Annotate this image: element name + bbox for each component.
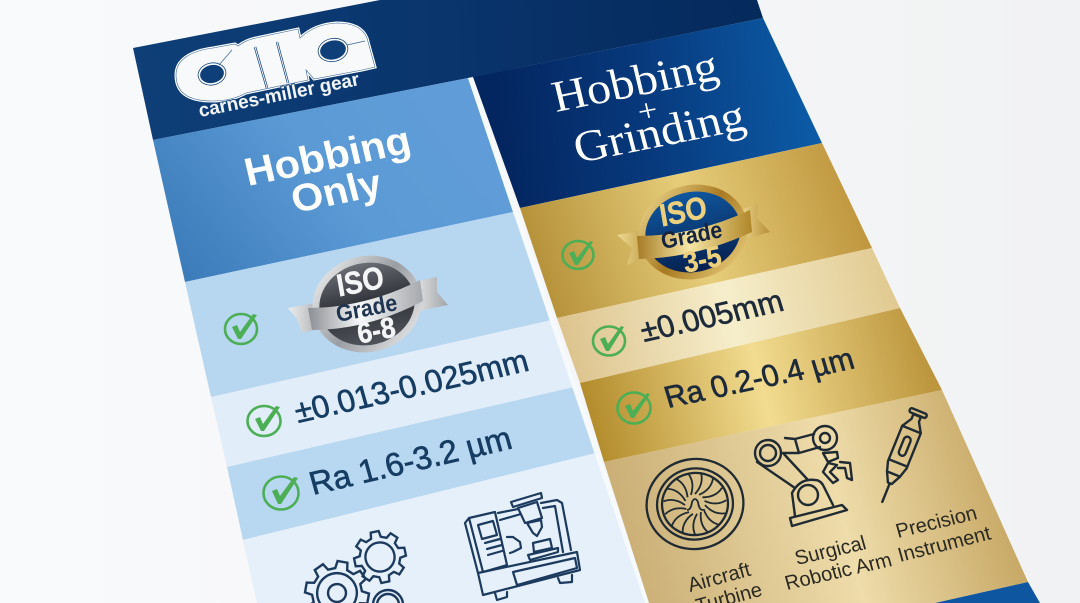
column header band xyxy=(473,18,822,208)
medal ring xyxy=(303,245,431,363)
spindle cone xyxy=(527,520,542,536)
badge: ISO grade 6-8 xyxy=(288,245,448,363)
badge number: 3-5 xyxy=(681,240,724,279)
logo outer halo xyxy=(176,23,375,101)
upper gear xyxy=(350,527,410,587)
medal face xyxy=(637,182,749,282)
instrument bands xyxy=(884,426,921,478)
applications row xyxy=(243,453,646,603)
logo hole rings xyxy=(196,36,350,88)
gripper xyxy=(823,452,852,483)
label: precision: Precision xyxy=(893,502,980,543)
icon: CNC machine xyxy=(465,493,580,600)
instrument cap xyxy=(909,408,927,419)
machine base xyxy=(478,552,580,595)
poster navy header xyxy=(133,0,763,140)
label: robotic arm: Robotic Arm xyxy=(782,549,894,595)
check: finish right xyxy=(618,392,650,424)
heading: Hobbing + Grinding xyxy=(547,41,750,173)
logo holes xyxy=(198,38,348,85)
small gear xyxy=(373,590,403,603)
surface finish row xyxy=(227,387,596,540)
control panel xyxy=(469,512,507,572)
work table xyxy=(528,539,558,560)
panel back edge xyxy=(465,518,478,573)
turbine hub xyxy=(687,499,703,510)
value: left surface finish: Ra 1.6-3.2 µm xyxy=(305,419,516,502)
icon: aircraft turbine xyxy=(639,451,751,557)
column header band xyxy=(153,78,513,282)
wrist inner xyxy=(820,433,830,443)
label: instrument: Instrument xyxy=(895,522,994,567)
panel: hobbing plus grinding column xyxy=(473,18,1040,603)
tolerance row xyxy=(557,248,900,383)
icon: gears xyxy=(300,527,410,603)
panel: hobbing only column xyxy=(153,78,646,603)
ribbon band xyxy=(308,280,423,330)
instrument needle xyxy=(882,483,890,502)
gantry xyxy=(498,500,571,552)
icon: precision instrument xyxy=(873,407,928,506)
logo hairlines xyxy=(219,41,365,65)
surface finish row xyxy=(580,308,942,462)
applications row xyxy=(604,390,1028,603)
check: finish left xyxy=(264,476,298,510)
turbine rings xyxy=(639,451,751,557)
application labels xyxy=(685,502,994,603)
value: left tolerance: ±0.013-0.025mm xyxy=(290,342,532,430)
badge ISO: ISO xyxy=(334,260,387,304)
column divider xyxy=(468,77,649,603)
spindle cap xyxy=(511,493,542,507)
side bracket xyxy=(507,537,521,553)
machine feet xyxy=(495,575,572,600)
badge Grade: Grade xyxy=(659,216,724,254)
turbine inner ring xyxy=(651,462,739,546)
shoulder joint xyxy=(798,485,818,505)
value: right tolerance: ±0.005mm xyxy=(636,283,787,349)
check: grade 6-8 xyxy=(225,314,257,344)
turbine blades xyxy=(663,473,727,536)
arm shoulder xyxy=(792,480,833,516)
heading line two: Grinding xyxy=(568,92,750,173)
check: grade 3-5 xyxy=(562,241,594,269)
logo letter shapes xyxy=(176,23,375,101)
badge: ISO grade 3-5 xyxy=(617,174,770,290)
icon: surgical robotic arm xyxy=(755,426,852,526)
lower arm xyxy=(757,453,808,488)
turbine fan ring xyxy=(657,468,733,540)
heading plus: + xyxy=(634,92,661,130)
base slot xyxy=(513,558,577,585)
forearm xyxy=(783,434,820,453)
ribbon tails xyxy=(288,277,448,333)
instrument body xyxy=(881,412,926,487)
medal ring xyxy=(629,174,757,290)
badge ISO: ISO xyxy=(657,190,710,234)
heading line two: Only xyxy=(287,162,386,221)
instrument slot xyxy=(898,436,912,457)
panel buttons xyxy=(485,539,502,555)
bottom blue strip xyxy=(935,582,1040,603)
badge number: 6-8 xyxy=(355,311,398,350)
large gear xyxy=(300,556,374,603)
check: tolerance right xyxy=(593,326,625,356)
wrist joint xyxy=(813,426,837,450)
logo wordmark: carnes-miller gear xyxy=(197,69,362,122)
logo slit highlights xyxy=(255,42,288,88)
elbow joint xyxy=(755,440,781,466)
checkmarks xyxy=(225,241,650,510)
heading line one: Hobbing xyxy=(547,41,723,121)
medal face xyxy=(311,253,423,355)
spindle body xyxy=(518,502,542,523)
panel screen xyxy=(478,521,497,539)
ribbon tails xyxy=(617,203,770,265)
value: right surface finish: Ra 0.2-0.4 µm xyxy=(660,342,858,415)
heading: Hobbing Only xyxy=(240,117,415,221)
badge Grade: Grade xyxy=(334,289,399,327)
ribbon band xyxy=(637,210,752,259)
tolerance row xyxy=(211,320,574,467)
grade row xyxy=(185,212,552,397)
logo slits xyxy=(255,42,288,88)
elbow inner xyxy=(760,445,776,461)
label: surgical: Surgical xyxy=(792,532,869,570)
grade row xyxy=(520,143,872,318)
label: aircraft: Aircraft xyxy=(685,559,753,597)
check: tolerance left xyxy=(248,406,280,436)
heading line one: Hobbing xyxy=(240,117,415,195)
logo: carnes-miller gear xyxy=(176,23,375,122)
arm base xyxy=(790,505,847,526)
